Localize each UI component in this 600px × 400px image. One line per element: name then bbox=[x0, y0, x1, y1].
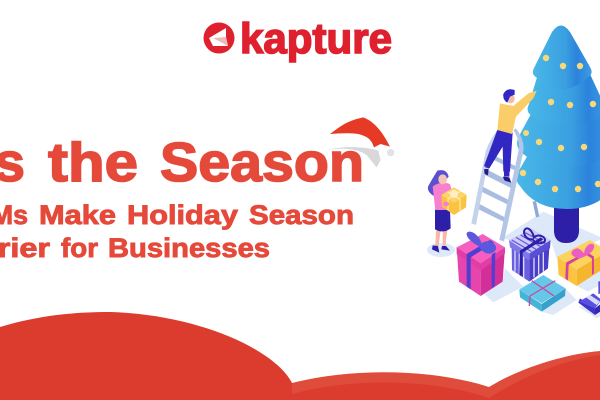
woman hand bbox=[443, 202, 449, 206]
striped gift bbox=[509, 228, 551, 282]
man lower legs and shoes bbox=[484, 157, 511, 183]
blue gift bbox=[519, 275, 566, 312]
pink gift bbox=[457, 232, 505, 296]
title bbox=[0, 131, 364, 193]
subtitle line 2 bbox=[0, 233, 270, 263]
subtitle line 1: Season bbox=[249, 200, 354, 230]
woman hair bbox=[428, 170, 449, 198]
logo: kapture bbox=[204, 15, 392, 63]
tree tier 3 bbox=[517, 112, 600, 167]
wave large hump bbox=[0, 312, 292, 400]
yellow gift bbox=[557, 240, 600, 286]
tree tier 2 bbox=[528, 74, 600, 126]
subtitle line 1: Holiday bbox=[127, 200, 238, 230]
tree ornaments bbox=[520, 55, 600, 192]
subtitle line 2: for bbox=[61, 233, 98, 263]
title word: Season: Season bbox=[160, 131, 364, 193]
woman legs bbox=[435, 230, 447, 247]
illustration: ladder bbox=[471, 128, 539, 241]
bottom red wave bbox=[0, 312, 600, 400]
illustration: christmas tree bbox=[516, 26, 600, 243]
subtitle bbox=[0, 200, 354, 263]
logo wordmark: kapture bbox=[240, 15, 392, 63]
illustration: gifts bbox=[457, 228, 600, 315]
subtitle line 1: Make bbox=[39, 200, 116, 230]
tree tier 4 bbox=[516, 155, 600, 209]
icon: logo circle bbox=[204, 22, 234, 54]
illustration: man decorating the tree bbox=[484, 89, 537, 172]
man shirt and arm bbox=[497, 91, 537, 134]
wave front layer bbox=[292, 355, 600, 400]
title word: the: the bbox=[48, 131, 138, 193]
woman shoes bbox=[432, 245, 450, 253]
wave back layer bbox=[292, 351, 600, 400]
tree trunk bbox=[554, 205, 579, 243]
icon: santa hat bbox=[325, 117, 394, 167]
man head and hair bbox=[503, 89, 515, 103]
subtitle line 1 bbox=[0, 200, 354, 230]
small purple gift bbox=[578, 281, 600, 315]
woman top bbox=[433, 183, 452, 210]
tree tier 1 bbox=[533, 26, 592, 89]
subtitle line 2: Businesses bbox=[108, 233, 270, 263]
illustration: floor shadows bbox=[427, 212, 600, 318]
man legs bbox=[484, 130, 513, 172]
woman skirt bbox=[435, 209, 451, 231]
illustration: woman holding a gift bbox=[428, 170, 467, 253]
gift held by woman bbox=[441, 187, 467, 215]
woman face bbox=[438, 174, 447, 184]
